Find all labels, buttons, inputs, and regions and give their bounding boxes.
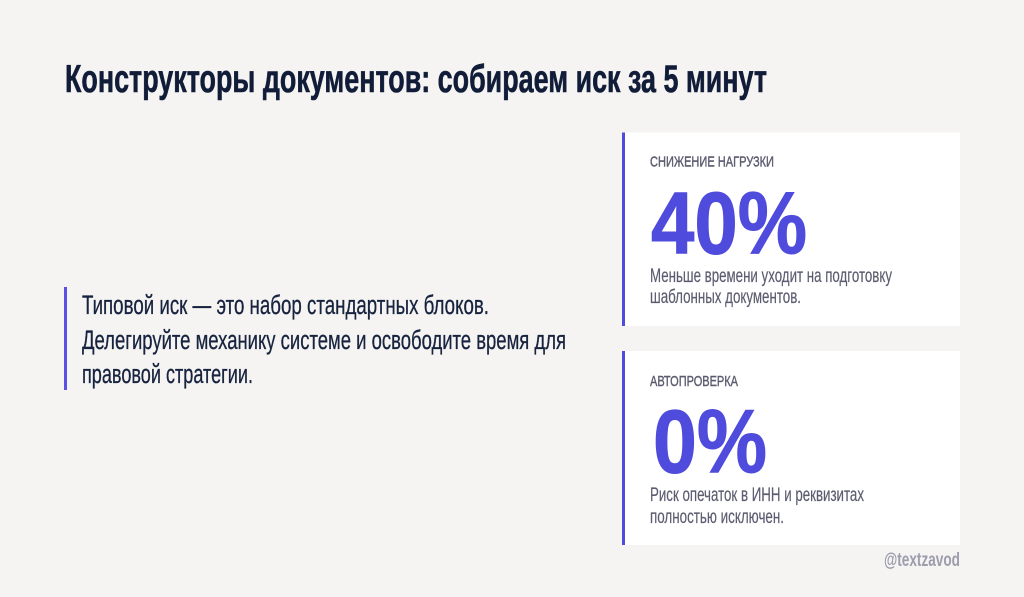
- card description: полностью исключен.: [650, 506, 784, 528]
- card background: [622, 132, 960, 326]
- big number 40%: 40%: [651, 174, 807, 272]
- card label: АВТОПРОВЕРКА: [650, 374, 738, 390]
- big number 0%: 0%: [653, 392, 767, 492]
- card label: СНИЖЕНИЕ НАГРУЗКИ: [650, 154, 774, 170]
- quote accent bar: [64, 287, 67, 390]
- panel: auto-check stat: [622, 351, 960, 545]
- card description: шаблонных документов.: [650, 286, 801, 308]
- quote text: [82, 290, 566, 389]
- quote text: Делегируйте механику системе и освободите время для: [82, 325, 566, 355]
- card background: [622, 351, 960, 545]
- card description: [650, 265, 892, 308]
- quote text: Типовой иск — это набор стандартных блоков.: [82, 290, 489, 320]
- quote text: правовой стратегии.: [82, 359, 253, 389]
- card description: Меньше времени уходит на подготовку: [650, 265, 892, 287]
- card description: Риск опечаток в ИНН и реквизитах: [650, 484, 864, 506]
- card accent bar: [622, 132, 625, 326]
- card description: [650, 484, 864, 528]
- callout: left quote: [64, 287, 566, 390]
- card accent bar: [622, 351, 625, 545]
- panel: load reduction stat: [622, 132, 960, 326]
- watermark: @textzavod: [884, 550, 960, 571]
